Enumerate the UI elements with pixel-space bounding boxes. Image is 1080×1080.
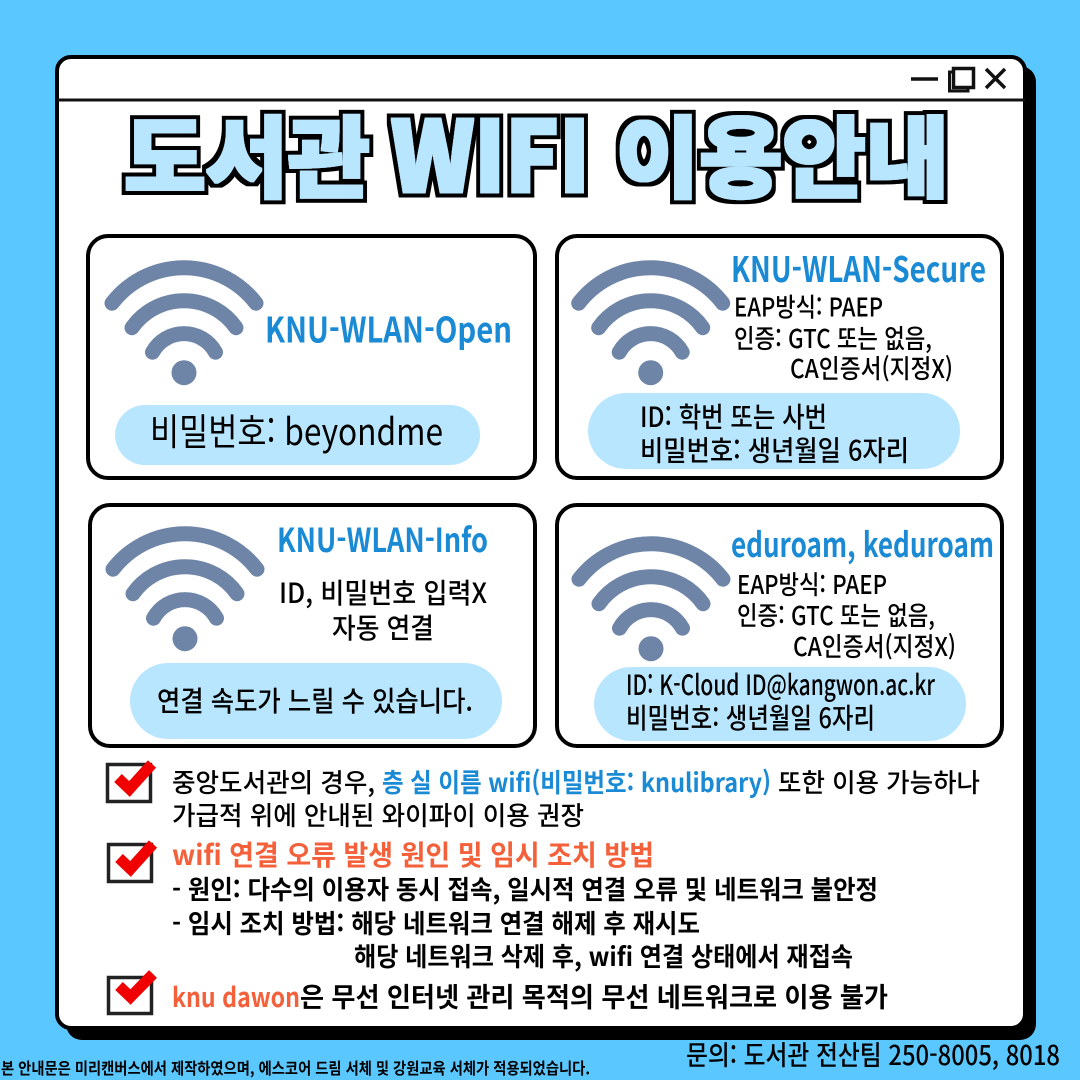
connection note	[279, 572, 487, 647]
credentials text	[626, 664, 935, 737]
credentials pill	[588, 393, 960, 469]
speed notice text: 연결 속도가 느릴 수 있습니다.	[157, 680, 473, 720]
credentials pill	[594, 667, 966, 741]
settings text	[734, 288, 953, 386]
title: WIFI	[391, 79, 590, 221]
title	[124, 79, 949, 221]
note: wifi error causes and fixes: wifi 연결 오류 발생 원인 및 임시 조치 방법	[172, 834, 654, 874]
password pill	[115, 405, 480, 465]
title bar divider	[57, 98, 1025, 102]
panel: eduroam, keduroam	[557, 505, 1002, 746]
note: central library wifi: 가급적 위에 안내된 와이파이 이용 권장	[172, 796, 584, 833]
credentials text: ID: 학번 또는 사번	[640, 396, 827, 436]
panel frame	[557, 505, 1002, 746]
speed notice pill	[130, 663, 502, 739]
password text: 비밀번호: beyondme	[150, 402, 443, 456]
panel frame	[88, 236, 535, 478]
title: 이용안내	[616, 89, 949, 216]
settings text: CA인증서(지정X)	[790, 349, 953, 386]
settings text: CA인증서(지정X)	[793, 627, 956, 664]
panel: KNU-WLAN-Open	[88, 236, 535, 478]
title: 도서관	[124, 89, 370, 216]
network name: KNU-WLAN-Open	[265, 303, 512, 354]
note: central library wifi: 층 실 이름 wifi(비밀번호: knulibrary)	[382, 763, 771, 800]
icon: wifi	[579, 268, 723, 385]
icon: wifi	[113, 534, 257, 651]
credentials text	[640, 396, 909, 470]
icon: window controls	[911, 68, 1005, 91]
panel: KNU-WLAN-Info	[90, 505, 535, 746]
icon: checkbox 1	[108, 764, 152, 802]
settings text: 인증: GTC 또는 없음,	[737, 596, 935, 633]
panel: KNU-WLAN-Secure	[557, 236, 1002, 478]
network name: KNU-WLAN-Secure	[731, 242, 986, 293]
credentials text: 비밀번호: 생년월일 6자리	[640, 430, 909, 470]
panel frame	[90, 505, 535, 746]
note: wifi error causes and fixes: - 원인: 다수의 이용자 동시 접속, 일시적 연결 오류 및 네트워크 불안정	[172, 870, 878, 907]
icon: checkbox 2	[108, 844, 153, 882]
note: knu dawon: 은 무선 인터넷 관리 목적의 무선 네트워크로 이용 불가	[300, 976, 888, 1015]
note: central library wifi: 또한 이용 가능하나	[778, 763, 980, 800]
panel frame	[557, 236, 1002, 478]
icon: checkbox 3	[108, 974, 153, 1014]
network name: eduroam, keduroam	[731, 518, 994, 567]
note: wifi error causes and fixes: - 임시 조치 방법: 해당 네트워크 연결 해제 후 재시도	[172, 904, 700, 941]
footer credit: 본 안내문은 미리캔버스에서 제작하였으며, 에스코어 드림 서체 및 강원교육 서체가 적용되었습니다.	[1, 1055, 590, 1079]
credentials text: 비밀번호: 생년월일 6자리	[626, 697, 875, 737]
note: wifi error causes and fixes: 해당 네트워크 삭제 후, wifi 연결 상태에서 재접속	[354, 937, 853, 974]
settings text: EAP방식: PAEP	[734, 288, 883, 325]
note: wifi error causes and fixes	[172, 834, 878, 974]
note: central library wifi	[172, 763, 980, 833]
credentials text: ID: K-Cloud ID@kangwon.ac.kr	[626, 664, 935, 704]
settings text	[737, 565, 956, 664]
note: central library wifi: 중앙도서관의 경우,	[172, 763, 375, 800]
icon: wifi	[112, 268, 256, 385]
network name: KNU-WLAN-Info	[277, 514, 488, 562]
settings text: 인증: GTC 또는 없음,	[734, 319, 932, 356]
settings text: EAP방식: PAEP	[737, 565, 887, 602]
note: knu dawon: knu dawon	[172, 976, 300, 1015]
icon: wifi	[579, 544, 723, 661]
connection note: 자동 연결	[332, 607, 434, 647]
connection note: ID, 비밀번호 입력X	[279, 572, 487, 612]
